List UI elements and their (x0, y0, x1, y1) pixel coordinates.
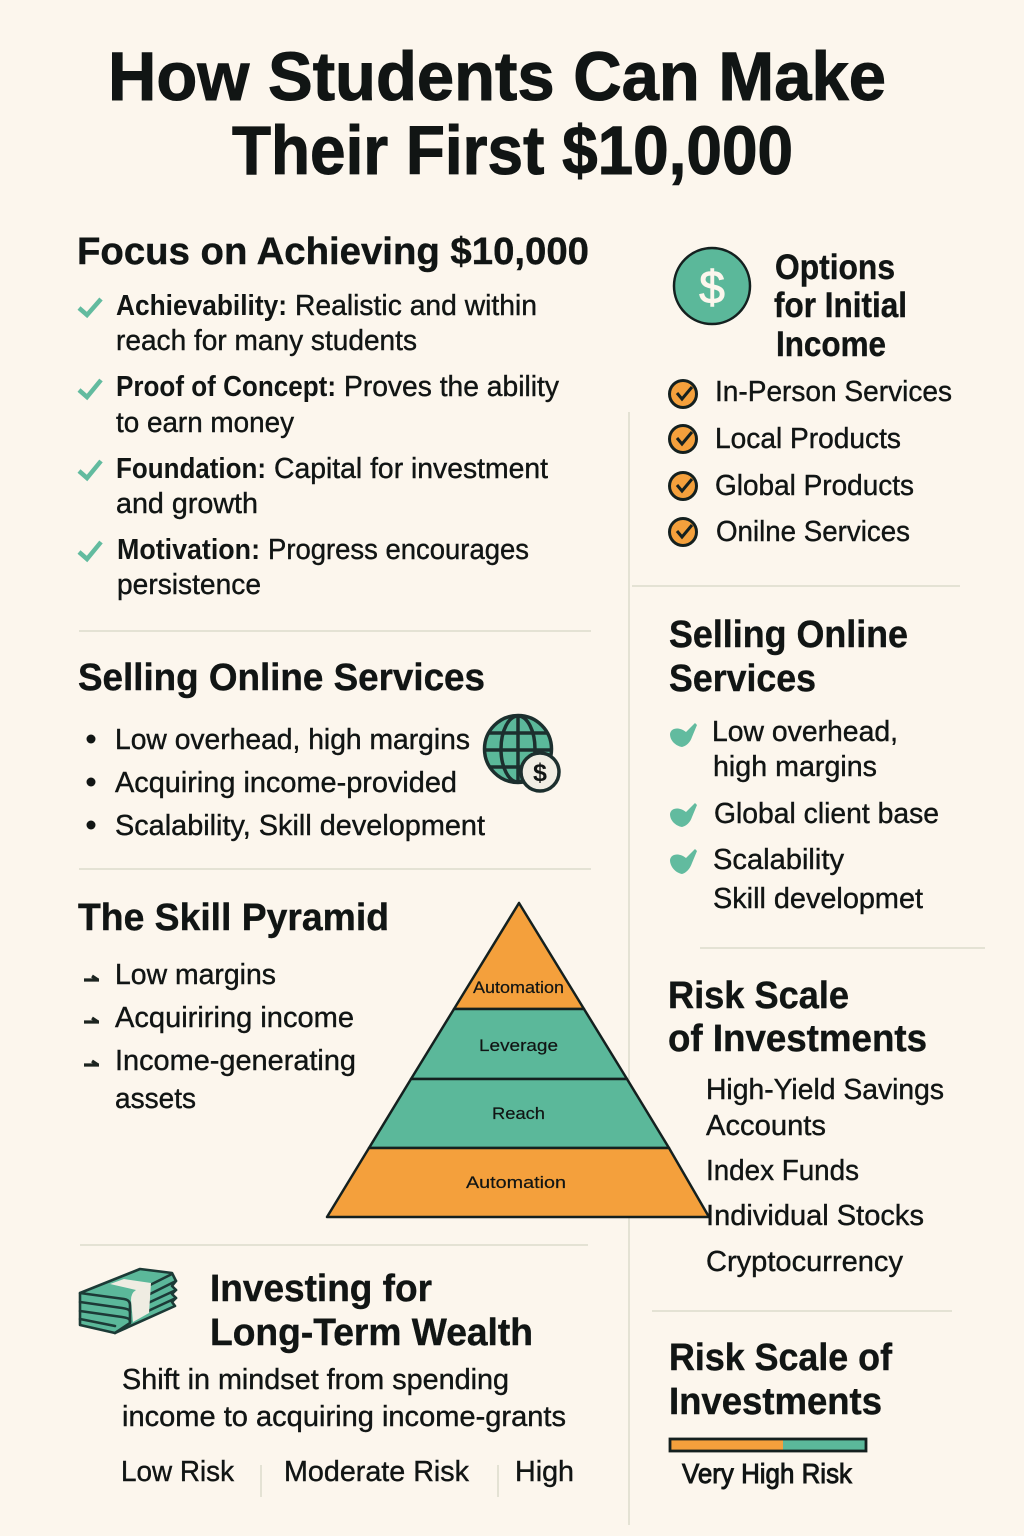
heading: options: Options (775, 248, 895, 287)
pyramid chart: Leverage (479, 1036, 558, 1055)
text: achievability: reach for many students (116, 325, 417, 357)
title: Their First $10,000 (232, 112, 793, 189)
heading: selling online services: Selling Online (669, 614, 908, 656)
bullet list text: Acquiring income-provided (115, 767, 457, 799)
text: foundation: and growth (116, 488, 258, 520)
panel: options for initial income (670, 248, 952, 548)
label: very high risk: Very High Risk (682, 1458, 853, 1489)
pyramid chart (327, 903, 709, 1217)
list text: Low overhead, (712, 716, 898, 748)
list text: Onilne Services (716, 516, 910, 548)
text: mindset (122, 1364, 566, 1433)
heading: risk scale: Risk Scale of (669, 1337, 892, 1379)
pyramid chart: Automation (473, 978, 564, 997)
bullet list text: Scalability, Skill development (115, 810, 485, 842)
bullet list text: Low overhead, high margins (115, 724, 470, 756)
panel: selling online services right (669, 614, 939, 915)
risk labels: High (515, 1456, 574, 1488)
icon: stack of money (80, 1269, 176, 1333)
heading: investing (210, 1268, 533, 1354)
list text (712, 716, 939, 915)
icon: orange check circles (670, 380, 696, 546)
text: achievability: Realistic and within (295, 290, 537, 322)
list text: Individual Stocks (706, 1200, 924, 1232)
heading: risk scale: of Investments (668, 1018, 927, 1060)
heading: options: Income (776, 325, 886, 364)
heading: risk scale: Investments (669, 1381, 882, 1423)
panel: selling online services left (78, 657, 559, 842)
list text: Scalability (713, 844, 845, 876)
icon: check marks (79, 299, 101, 559)
heading: selling online services: Selling Online Services (78, 657, 485, 699)
heading: investing: Investing for (210, 1268, 432, 1310)
text: mindset: income to acquiring income-grants (122, 1401, 566, 1433)
title: How Students Can Make (108, 38, 886, 115)
list text: Global Products (715, 470, 914, 502)
list text: Acquiriring income (115, 1002, 354, 1034)
list text (715, 376, 952, 548)
text: motivation: persistence (117, 569, 261, 601)
list text: Local Products (715, 423, 901, 455)
heading: risk scale (669, 1337, 892, 1423)
heading: options: for Initial (774, 286, 907, 325)
heading: selling online services: Services (669, 658, 816, 700)
icon: teal checks (670, 723, 697, 874)
text: foundation: Capital for investment (274, 453, 548, 485)
text: achievability: Achievability: (116, 290, 287, 322)
pyramid chart: Automation (466, 1173, 566, 1192)
bullet dots (86, 734, 96, 830)
heading: investing: Long-Term Wealth (210, 1312, 533, 1354)
heading: risk scale: Risk Scale (668, 975, 849, 1017)
panel: risk scale of investments bar (669, 1337, 892, 1489)
list text (115, 959, 356, 1115)
risk labels: Low Risk (121, 1456, 235, 1488)
text: proof of concept: to earn money (116, 407, 295, 439)
text: motivation (117, 534, 529, 601)
list text: High-Yield Savings (706, 1074, 944, 1106)
list text: Global client base (714, 798, 939, 830)
text: foundation: Foundation: (116, 453, 266, 485)
panel: focus on achieving $10,000 (77, 231, 589, 601)
title (108, 38, 886, 189)
heading: focus: Focus on Achieving $10,000 (77, 231, 589, 273)
list text: In-Person Services (715, 376, 952, 408)
text: proof of concept: Proves the ability (344, 371, 560, 403)
risk labels: Moderate Risk (284, 1456, 470, 1488)
risk labels (121, 1456, 574, 1488)
text: motivation: Progress encourages (268, 534, 529, 566)
icon: small arrows (84, 976, 99, 1065)
text: motivation: Motivation: (117, 534, 260, 566)
list text: assets (115, 1083, 196, 1115)
list text: Skill developmet (713, 883, 923, 915)
text: achievability (116, 290, 537, 357)
icon: dollar circle: $ (699, 261, 725, 313)
heading: options (774, 248, 907, 364)
heading: risk scale (668, 975, 927, 1060)
text: proof of concept (116, 371, 560, 439)
pyramid chart: Reach (492, 1104, 545, 1123)
list text: Cryptocurrency (706, 1246, 904, 1278)
risk bar (670, 1439, 866, 1451)
list text: Accounts (706, 1110, 826, 1142)
icon: dollar circle (674, 248, 750, 324)
text: mindset: Shift in mindset from spending (122, 1364, 509, 1396)
heading: skill pyramid: The Skill Pyramid (78, 897, 389, 939)
icon: globe with dollar: $ (533, 759, 547, 787)
list text (706, 1074, 944, 1278)
panel: the skill pyramid (78, 897, 709, 1217)
list text: Income-generating (115, 1045, 356, 1077)
list text: high margins (713, 751, 877, 783)
icon: globe with dollar (484, 716, 559, 791)
bullet list text (115, 724, 485, 842)
list text: Index Funds (706, 1155, 859, 1187)
text: proof of concept: Proof of Concept: (116, 371, 336, 403)
heading: selling online services (669, 614, 908, 700)
text: foundation (116, 453, 548, 520)
list text: Low margins (115, 959, 276, 991)
panel: investing for long-term wealth (80, 1268, 574, 1488)
panel: risk scale of investments list (668, 975, 944, 1278)
